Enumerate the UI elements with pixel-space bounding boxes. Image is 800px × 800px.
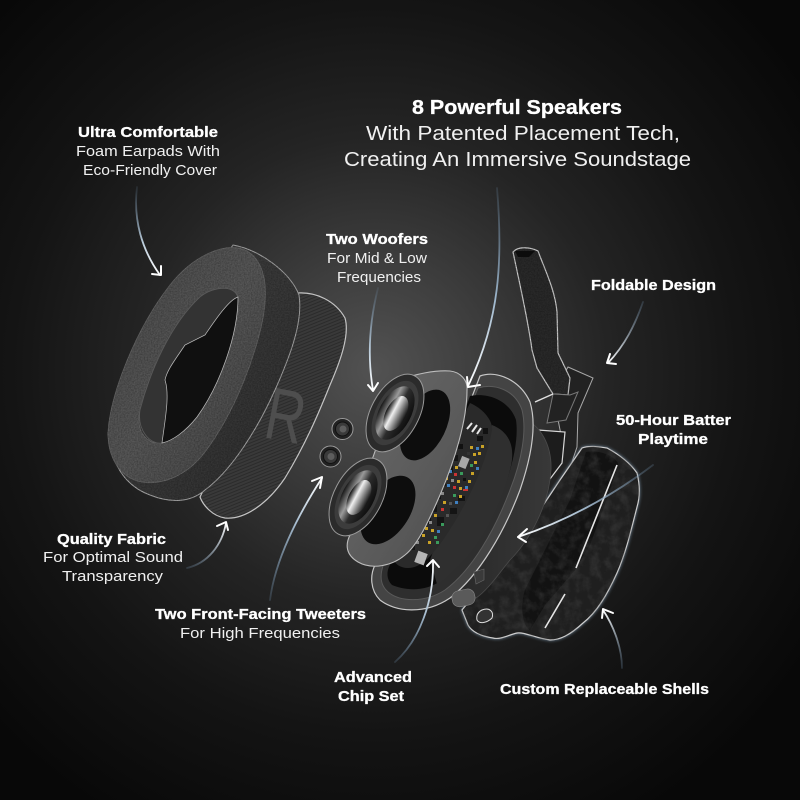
label: tweeters: For High Frequencies xyxy=(180,625,340,642)
components xyxy=(408,428,488,550)
letter R on mesh: R xyxy=(259,372,312,460)
hinge struts xyxy=(535,394,553,402)
inner cavity xyxy=(387,395,517,589)
arrow: battery xyxy=(518,465,653,542)
shell lower opening xyxy=(477,609,493,623)
label: shells: Custom Replaceable Shells xyxy=(500,681,709,698)
padded band xyxy=(513,248,570,395)
label: chip set: Chip Set xyxy=(338,688,404,705)
label: tweeters: Two Front-Facing Tweeters xyxy=(155,606,366,623)
label: tweeters xyxy=(155,606,366,642)
arrow: tweeters xyxy=(270,477,322,600)
tweeter upper xyxy=(332,418,353,440)
outer ring xyxy=(372,374,533,610)
earpad mesh fabric xyxy=(200,293,346,518)
label: quality fabric: Transparency xyxy=(62,568,164,585)
label: two woofers xyxy=(326,231,428,286)
heading: 8 powerful speakers xyxy=(344,97,691,171)
outer fork xyxy=(540,367,593,555)
connector nub xyxy=(451,588,476,608)
plate hole lower xyxy=(349,466,427,554)
arrow: shells xyxy=(602,609,622,668)
label: ultra comfortable: Foam Earpads With xyxy=(76,143,220,160)
inner floor xyxy=(430,425,512,584)
label: two woofers: Frequencies xyxy=(337,269,421,286)
label: battery xyxy=(616,412,731,448)
woofer plate xyxy=(347,371,467,566)
label: foldable design: Foldable Design xyxy=(591,277,716,294)
large chip xyxy=(458,456,470,469)
arrow: ultra comfortable xyxy=(136,187,161,275)
shell inner panel xyxy=(522,452,618,630)
label: ultra comfortable: Eco-Friendly Cover xyxy=(83,162,217,179)
circuit board xyxy=(392,403,492,568)
driver housing xyxy=(372,374,551,610)
headband arm and hinge xyxy=(513,248,593,555)
replaceable shell xyxy=(462,446,639,640)
hinge block xyxy=(547,392,578,423)
earpad inner recess xyxy=(140,288,238,443)
band opening xyxy=(515,251,535,257)
label: quality fabric: Quality Fabric xyxy=(57,531,166,548)
arrow: eight speakers xyxy=(467,188,500,387)
label: quality fabric: For Optimal Sound xyxy=(43,549,183,566)
label: ultra comfortable xyxy=(76,124,220,179)
woofer upper xyxy=(354,365,436,461)
label: two woofers: For Mid & Low xyxy=(327,250,427,267)
board base xyxy=(392,403,492,568)
label: battery: 50-Hour Batter xyxy=(616,412,731,429)
label: chip set: Advanced xyxy=(334,669,412,686)
heading: 8 powerful speakers: 8 Powerful Speakers xyxy=(412,97,622,119)
earpad side wall xyxy=(108,245,300,500)
label: battery: Playtime xyxy=(638,431,708,448)
label: quality fabric xyxy=(43,531,183,585)
shell stripes xyxy=(545,465,617,628)
arrow: foldable design xyxy=(607,302,643,364)
woofer lower xyxy=(317,449,399,545)
earpad front face xyxy=(108,248,265,483)
label: chip set xyxy=(334,669,412,705)
foam earpad xyxy=(108,245,300,500)
screw post xyxy=(474,569,484,584)
board pins xyxy=(467,423,481,434)
bent bracket xyxy=(538,430,565,483)
heading: 8 powerful speakers: Creating An Immersive Soundstage xyxy=(344,149,691,171)
arrow: fabric xyxy=(187,522,228,568)
plate hole upper xyxy=(389,382,461,468)
arrow: two woofers xyxy=(368,288,378,391)
lower chip xyxy=(414,551,428,565)
heading: 8 powerful speakers: With Patented Placement Tech, xyxy=(366,123,680,145)
tweeter lower xyxy=(320,446,341,467)
rear dome xyxy=(440,420,551,598)
inner ring xyxy=(381,386,524,600)
label: ultra comfortable: Ultra Comfortable xyxy=(78,124,218,141)
label: two woofers: Two Woofers xyxy=(326,231,428,248)
earpad opening xyxy=(162,297,238,443)
arrow: chip set xyxy=(395,560,439,662)
